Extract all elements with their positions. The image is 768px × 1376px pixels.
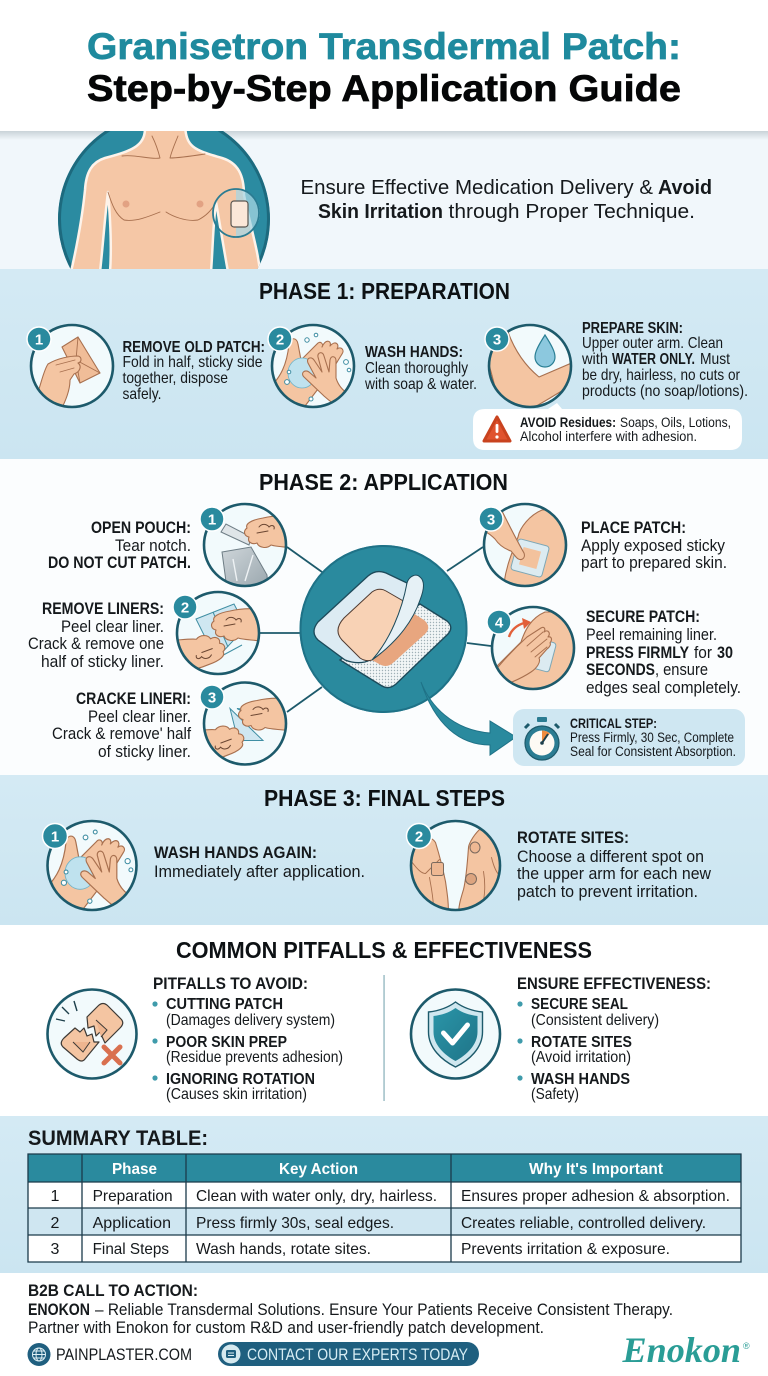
list: ensure effectiveness: [517, 975, 711, 1103]
step: rotate sites: [517, 829, 711, 901]
table: Creates reliable, controlled delivery.: [461, 1215, 706, 1232]
text: B2B call to action: – Reliable Transdermal Solutions. Ensure Your Patients Receive Consistent Therapy.: [95, 1301, 673, 1319]
panel: phase 2 application: [28, 474, 745, 766]
list: ensure effectiveness: (Safety): [531, 1086, 579, 1103]
step: cracke liner: [52, 690, 191, 761]
divider: [383, 975, 385, 1101]
callout: avoid residues: AVOID Residues:: [520, 415, 616, 430]
step: wash hands: WASH HANDS:: [365, 344, 463, 361]
panel: call to action: [0, 1273, 768, 1376]
hero tagline: Avoid: [658, 177, 712, 199]
step: secure patch: PRESS FIRMLY: [586, 644, 689, 662]
table: Key Action: [279, 1161, 358, 1178]
title: Granisetron Transdermal Patch:: [87, 25, 681, 67]
button: contact our experts: CONTACT OUR EXPERTS TODAY: [247, 1346, 468, 1364]
heading: phase 1: PHASE 1: PREPARATION: [259, 278, 510, 304]
step: prepare skin: with: [581, 351, 608, 368]
title: [0, 0, 768, 131]
heading: pitfalls: COMMON PITFALLS & EFFECTIVENESS: [176, 937, 592, 963]
icon: secure patch: [491, 607, 579, 694]
callout: critical step: [513, 709, 745, 766]
step: prepare skin: WATER ONLY.: [612, 351, 695, 368]
list: ensure effectiveness: SECURE SEAL: [531, 996, 628, 1013]
icon: fold old patch: [31, 325, 113, 412]
step: remove old patch: Fold in half, sticky side: [122, 354, 263, 371]
list: pitfalls to avoid: PITFALLS TO AVOID:: [153, 975, 308, 993]
step: remove liners: [28, 600, 164, 671]
logo: Enokon: Enokon: [621, 1330, 741, 1370]
badge 2: 2: [276, 332, 284, 348]
badge: wash again 1: 1: [51, 828, 59, 846]
badge: crack liner 3: [200, 685, 224, 709]
panel: hero: [0, 131, 768, 269]
arrow: to critical step: [421, 682, 516, 755]
step: remove liners: Peel clear liner.: [61, 618, 164, 636]
step: cracke liner: Crack & remove' half: [52, 725, 191, 743]
list: pitfalls to avoid: (Damages delivery system): [166, 1012, 335, 1029]
icon: wash hands: [270, 324, 356, 408]
list: ensure effectiveness: ENSURE EFFECTIVENESS:: [517, 975, 711, 993]
step: open pouch: Tear notch.: [115, 537, 191, 555]
step: open pouch: DO NOT CUT PATCH.: [48, 554, 191, 572]
hero tagline: Skin Irritation: [318, 201, 443, 223]
list: pitfalls to avoid: IGNORING ROTATION: [166, 1071, 315, 1088]
step: remove old patch: safely.: [122, 386, 162, 403]
badge 3: 3: [493, 332, 501, 348]
step: wash hands: [364, 344, 477, 393]
icon: wash hands again: [46, 820, 138, 912]
step: rotate sites: ROTATE SITES:: [517, 829, 629, 847]
button: contact our experts: [218, 1342, 479, 1366]
step: open pouch: [48, 519, 191, 572]
table: Why It's Important: [529, 1161, 664, 1178]
list: pitfalls to avoid: CUTTING PATCH: [166, 996, 283, 1013]
text: B2B call to action: [28, 1282, 673, 1337]
list: pitfalls to avoid: [152, 975, 343, 1103]
step: remove old patch: REMOVE OLD PATCH:: [122, 339, 265, 356]
list: pitfalls to avoid: POOR SKIN PREP: [166, 1034, 287, 1051]
step: rotate sites: patch to prevent irritation.: [517, 883, 698, 901]
badge: pouch 1: [200, 507, 224, 531]
step: prepare skin: products (no soap/lotions).: [582, 383, 748, 400]
icon: globe: [28, 1343, 50, 1366]
list: ensure effectiveness: ROTATE SITES: [531, 1034, 632, 1051]
step: secure patch: [586, 608, 741, 697]
badge 2: [268, 327, 292, 351]
panel: phase 3 final steps: [0, 775, 768, 925]
badge: secure patch 4: [487, 610, 511, 634]
panel: phase 1 preparation: [0, 269, 768, 459]
badge: pouch 1: 1: [208, 512, 216, 528]
badge: secure patch 4: 4: [495, 614, 504, 632]
step: wash hands again: WASH HANDS AGAIN:: [154, 844, 317, 862]
hero tagline: Ensure Effective Medication Delivery &: [300, 177, 654, 199]
icon: stopwatch: [525, 717, 559, 760]
table: Prevents irritation & exposure.: [461, 1241, 670, 1258]
icon: open pouch: [202, 502, 288, 588]
icon: place patch: [479, 504, 571, 591]
list: ensure effectiveness: (Avoid irritation): [531, 1049, 631, 1066]
heading: summary table: SUMMARY TABLE:: [28, 1127, 208, 1150]
step: remove liners: REMOVE LINERS:: [42, 600, 164, 618]
step: prepare skin: [581, 320, 748, 400]
step: cracke liner: of sticky liner.: [98, 743, 191, 761]
callout: avoid residues: Alcohol interfere with adhesion.: [520, 429, 697, 444]
step: prepare skin: be dry, hairless, no cuts or: [582, 367, 741, 384]
badge: crack liner 3: 3: [208, 690, 216, 706]
step: secure patch: SECONDS: [586, 661, 655, 679]
step: secure patch: edges seal completely.: [586, 679, 741, 697]
table: Press firmly 30s, seal edges.: [196, 1215, 394, 1232]
callout: critical step: Seal for Consistent Absorption.: [570, 744, 736, 759]
icon: arm and water drop: [484, 325, 574, 412]
step: remove old patch: [122, 339, 265, 403]
badge: wash again 1: [42, 824, 68, 848]
step: secure patch: for: [694, 644, 712, 662]
step: place patch: part to prepared skin.: [581, 554, 727, 572]
icon: warning triangle: [484, 417, 510, 441]
step: secure patch: 30: [717, 644, 733, 662]
step: cracke liner: Peel clear liner.: [88, 708, 191, 726]
step: secure patch: Peel remaining liner.: [586, 626, 717, 644]
callout: critical step: Press Firmly, 30 Sec, Complete: [570, 730, 734, 745]
text: B2B call to action: B2B CALL TO ACTION:: [28, 1282, 198, 1300]
step: rotate sites: the upper arm for each new: [517, 865, 711, 883]
logo: Enokon: ®: [743, 1341, 750, 1351]
table: Ensures proper adhesion & absorption.: [461, 1188, 730, 1205]
badge: liners 2: 2: [181, 600, 189, 616]
step: place patch: PLACE PATCH:: [581, 519, 686, 537]
table: 3: [51, 1241, 60, 1258]
step: prepare skin: Upper outer arm. Clean: [582, 335, 723, 352]
icon: crack liner: [202, 681, 288, 766]
table: Wash hands, rotate sites.: [196, 1241, 371, 1258]
heading: phase 3: PHASE 3: FINAL STEPS: [264, 785, 505, 811]
icon: shield check: [411, 990, 500, 1078]
badge: liners 2: [173, 595, 197, 619]
step: place patch: Apply exposed sticky: [581, 537, 726, 555]
panel: summary table: [0, 1116, 768, 1273]
icon: patch highlight ring: [213, 189, 260, 237]
panel: common pitfalls and effectiveness: [0, 925, 768, 1116]
badge 1: 1: [35, 332, 43, 348]
text: B2B call to action: Partner with Enokon for custom R&D and user-friendly patch development.: [28, 1319, 544, 1337]
icon: central patch diagram: [300, 545, 468, 713]
icon: rotate sites arms: [410, 820, 502, 912]
connector lines: [260, 547, 491, 712]
list: ensure effectiveness: WASH HANDS: [531, 1071, 630, 1088]
icon: torso with patch on upper arm: [58, 131, 270, 269]
badge 1: [27, 327, 51, 351]
callout: avoid residues: Soaps, Oils, Lotions,: [620, 415, 731, 430]
table: Clean with water only, dry, hairless.: [196, 1188, 437, 1205]
step: open pouch: OPEN POUCH:: [91, 519, 191, 537]
badge 3: [485, 327, 509, 351]
step: rotate sites: Choose a different spot on: [517, 848, 704, 866]
heading: phase 2: PHASE 2: APPLICATION: [259, 469, 508, 495]
hero tagline: [300, 177, 712, 223]
step: place patch: [581, 519, 727, 572]
callout: critical step: CRITICAL STEP:: [570, 716, 657, 731]
table: Final Steps: [93, 1241, 169, 1258]
icon: remove liners: [176, 590, 260, 676]
table: Preparation: [93, 1188, 173, 1205]
step: wash hands: with soap & water.: [364, 376, 477, 393]
list: pitfalls to avoid: (Causes skin irritation): [166, 1086, 307, 1103]
step: secure patch: SECURE PATCH:: [586, 608, 700, 626]
badge: rotate 2: 2: [415, 828, 423, 846]
badge: place patch 3: [479, 507, 503, 531]
text: B2B call to action: ENOKON: [28, 1301, 90, 1319]
step: remove liners: Crack & remove one: [28, 635, 164, 653]
step: remove liners: half of sticky liner.: [41, 653, 164, 671]
step: prepare skin: Must: [700, 351, 730, 368]
table: [28, 1154, 741, 1262]
table: Application: [93, 1215, 171, 1232]
list: ensure effectiveness: (Consistent delivery): [531, 1012, 659, 1029]
table: 2: [51, 1215, 60, 1232]
badge: place patch 3: 3: [487, 512, 495, 528]
table: 1: [51, 1188, 60, 1205]
step: prepare skin: PREPARE SKIN:: [582, 320, 683, 337]
list: pitfalls to avoid: (Residue prevents adhesion): [166, 1049, 343, 1066]
step: remove old patch: together, dispose: [122, 370, 228, 387]
table: Phase: [112, 1161, 157, 1178]
step: wash hands: Clean thoroughly: [365, 360, 468, 377]
website: PAINPLASTER.COM: [56, 1346, 192, 1364]
step: secure patch: , ensure: [655, 661, 708, 679]
step: wash hands again: [154, 844, 365, 881]
icon: cut patch: [48, 990, 136, 1078]
badge: rotate 2: [406, 824, 432, 848]
hero tagline: through Proper Technique.: [448, 201, 695, 223]
callout: avoid residues: [473, 403, 742, 450]
step: wash hands again: Immediately after application.: [154, 863, 365, 881]
title: Step-by-Step Application Guide: [87, 67, 681, 109]
step: cracke liner: CRACKE LINERI:: [76, 690, 191, 708]
